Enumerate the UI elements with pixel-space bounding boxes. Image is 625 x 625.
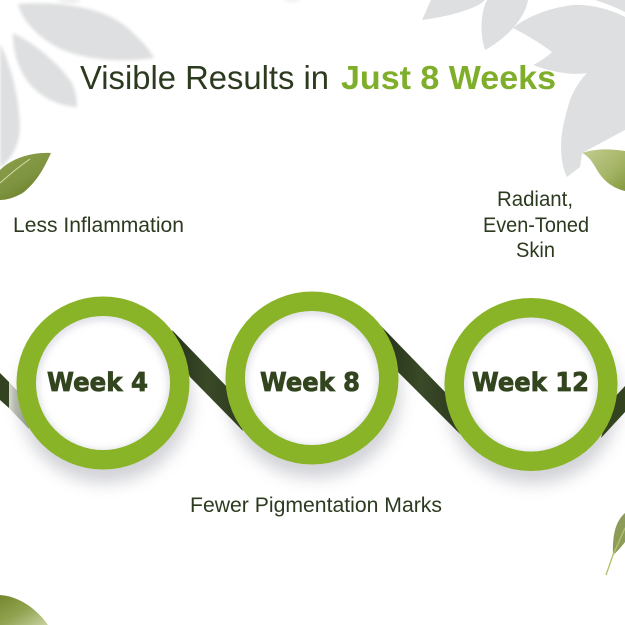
ring: week 12 (444, 298, 618, 471)
label: less inflammation: Less Inflammation (13, 214, 184, 237)
shadow leaves: top left (0, 0, 302, 168)
label: week 12: Week 12 (472, 368, 589, 398)
label: radiant even-toned skin: Radiant, (497, 188, 573, 211)
ribbon: week 4 to week 8 (172, 330, 243, 431)
title: Just 8 Weeks (341, 59, 556, 96)
label: radiant even-toned skin (483, 188, 589, 262)
label: fewer pigmentation marks: Fewer Pigmentation Marks (190, 494, 442, 517)
ring shadows (19, 310, 619, 484)
title: Visible Results in (80, 59, 329, 96)
label: week 8: Week 8 (260, 368, 360, 398)
label: radiant even-toned skin: Skin (516, 239, 555, 262)
ribbon: left edge (0, 373, 29, 429)
ribbon: right edge (601, 386, 625, 438)
ring: week 4 (16, 296, 190, 470)
ribbon: week 8 to week 12 (381, 326, 460, 434)
icon: green leaf bottom right (606, 513, 625, 575)
label: week 4: Week 4 (47, 368, 148, 398)
shadow leaves: top right (422, 0, 625, 177)
icon: green leaf right (582, 149, 625, 191)
icon: green leaf left (0, 153, 51, 200)
label: radiant even-toned skin: Even-Toned (483, 214, 589, 237)
title (80, 59, 556, 96)
icon: green leaf bottom left (0, 595, 48, 625)
ring: week 8 (226, 292, 398, 464)
